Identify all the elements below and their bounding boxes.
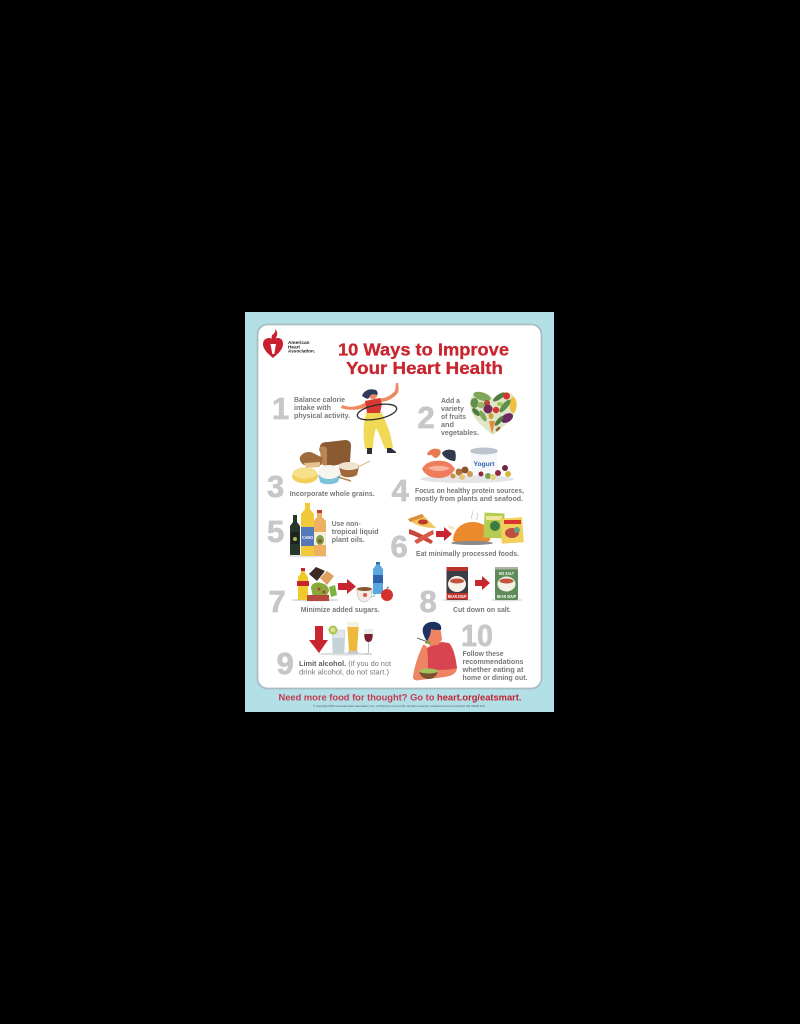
- logo: American Heart Association: [263, 329, 315, 358]
- icon: plant oil bottles: CANO: [302, 535, 313, 540]
- icon: whole grains: [292, 440, 370, 484]
- poster background: [245, 312, 554, 712]
- tip 4: number: 4: [392, 473, 410, 508]
- logo: American Heart Association: Heart: [288, 344, 300, 349]
- icon: bean soup cans: NO SALT: [499, 571, 514, 576]
- tip 4: text: [415, 486, 524, 503]
- tip 1: number: 1: [272, 391, 289, 426]
- tip 10: text: recommendations: [462, 657, 524, 666]
- tip 9: text: [299, 659, 392, 676]
- tip 2: text: vegetables.: [441, 428, 479, 437]
- white card panel: [258, 324, 542, 688]
- tip 9: text: drink alcohol, do not start.): [299, 668, 389, 676]
- tip 10: text: Follow these: [462, 649, 504, 658]
- tip 5: text: tropical liquid: [332, 527, 379, 536]
- tip 6: text: Eat minimally processed foods.: [416, 549, 519, 558]
- tip 2: text: and: [441, 420, 454, 429]
- tip 4: text: Focus on healthy protein sources,: [415, 486, 524, 495]
- tip 5: number: 5: [267, 514, 284, 549]
- tip 9: text: Limit alcohol. (If you do not: [299, 659, 392, 668]
- tip 10: text: [462, 649, 528, 682]
- tip 7: text: Minimize added sugars.: [301, 605, 380, 614]
- tip 5: text: [332, 519, 379, 544]
- tip 5: text: Use non-: [332, 519, 361, 528]
- tip 3: text: Incorporate whole grains.: [290, 489, 375, 498]
- tip 5: text: plant oils.: [332, 535, 365, 544]
- logo: American Heart Association: American: [288, 340, 310, 345]
- icon: healthy proteins: Yogurt: [474, 461, 495, 468]
- tip 10: text: home or dining out.: [462, 673, 528, 682]
- logo: American Heart Association: Association.: [288, 349, 315, 354]
- tip 1: text: [294, 395, 350, 420]
- tip 9: number: 9: [276, 646, 294, 681]
- tip 8: text: Cut down on salt.: [453, 605, 511, 614]
- tip 2: text: Add a: [441, 396, 461, 405]
- icon: sugary foods to water and fruit: [291, 562, 393, 602]
- tip 1: text: physical activity.: [294, 411, 350, 420]
- tip 1: text: intake with: [294, 403, 331, 412]
- tip 1: text: Balance calorie: [294, 395, 345, 404]
- icon: bean soup cans: BEAN SOUP: [497, 594, 516, 599]
- tip 8: number: 8: [420, 584, 437, 619]
- copyright line: © Copyright 2021 American Heart Association, Inc., a 501(c)(3) not-for-profit. All rights reserved. Unauthorized use prohibited. WF 00000 3/21: [313, 704, 485, 708]
- tip 3: number: 3: [267, 469, 284, 504]
- icon: bean soup cans: BEAN SOUP: [448, 594, 466, 599]
- footer call to action: Need more food for thought? Go to heart.org/eatsmart.: [278, 692, 522, 702]
- tip 10: number: 10: [461, 618, 493, 653]
- tip 10: text: whether eating at: [462, 665, 524, 674]
- tip 6: number: 6: [390, 529, 408, 564]
- icon: down arrow and drinks: [309, 622, 373, 656]
- tip 7: number: 7: [268, 584, 286, 619]
- title: 10 Ways to Improve: [338, 340, 509, 360]
- tip 2: number: 2: [418, 400, 435, 435]
- icon: plant oil bottles: [287, 503, 329, 558]
- title: Your Heart Health: [346, 358, 503, 378]
- title: [338, 340, 509, 378]
- icon: man eating a salad: [413, 622, 457, 680]
- icon: heart of fruits and vegetables: [470, 390, 517, 435]
- tip 2: text: [441, 396, 479, 437]
- tip 2: text: of fruits: [441, 412, 466, 421]
- icon: bean soup cans: [442, 567, 523, 602]
- icon: woman with hula hoop: [341, 383, 399, 454]
- icon: processed foods to fresh foods: [408, 511, 524, 545]
- tip 2: text: variety: [441, 404, 465, 413]
- icon: healthy proteins: [420, 448, 514, 483]
- tip 4: text: mostly from plants and seafood.: [415, 494, 523, 503]
